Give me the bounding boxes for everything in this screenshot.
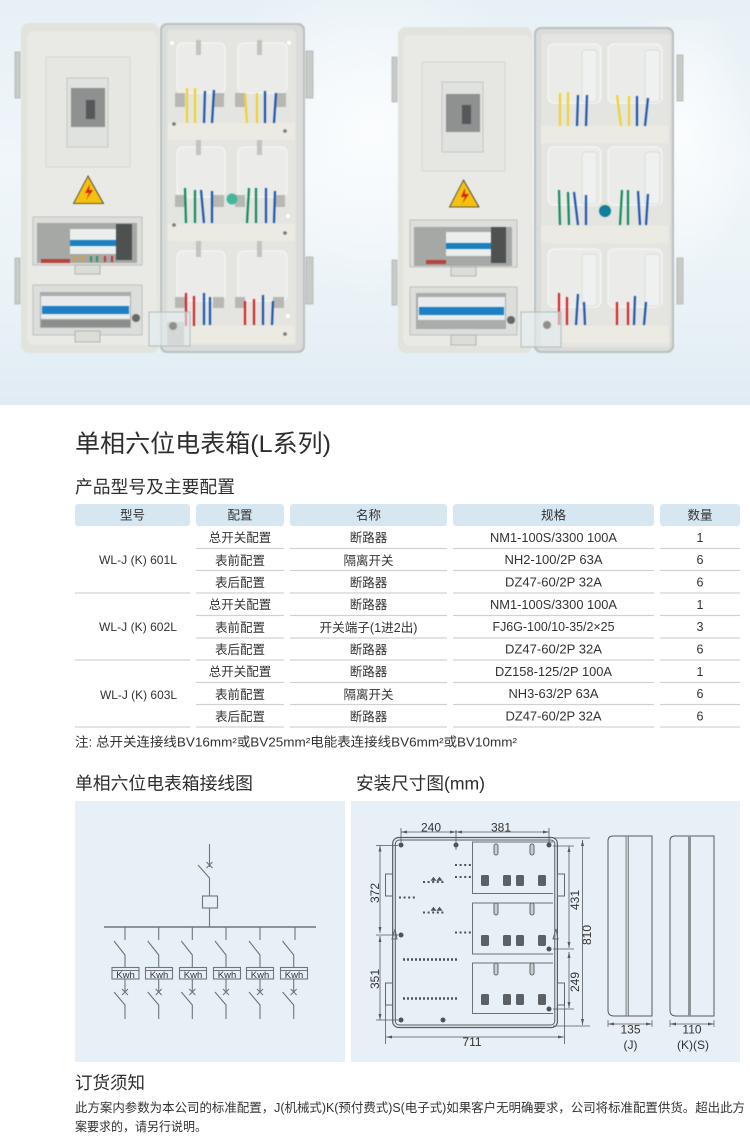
side view J: (J) (624, 1038, 638, 1052)
meter labels: Kwh (184, 970, 202, 981)
heading: product models: 产品型号及主要配置 (75, 477, 235, 497)
rows 603L: NH3-63/2P 63A (508, 687, 599, 701)
transparent cover (534, 27, 674, 353)
hinges (15, 51, 313, 304)
branch 5 (246, 927, 274, 1019)
meter modules (582, 50, 660, 306)
drilled hole rows (399, 865, 472, 998)
rows 603L: 断路器 (350, 709, 388, 724)
rows 601L: NH2-100/2P 63A (504, 553, 603, 567)
upper module window (33, 217, 142, 265)
lower module window (410, 287, 517, 335)
warning triangle (450, 180, 479, 207)
dimension numbers: 381 (491, 820, 511, 834)
mounting slots (494, 844, 534, 975)
rows 601L: NM1-100S/3300 100A (490, 531, 618, 545)
rows 601L: 断路器 (350, 575, 388, 590)
side view K S: 110 (682, 1022, 702, 1036)
table header: 名称 (356, 508, 381, 522)
model names: WL-J (K) 601L (99, 553, 177, 567)
dimension numbers: 431 (568, 890, 582, 910)
side view K S (670, 836, 714, 1052)
photo banner background (0, 0, 750, 405)
rows 602L: FJ6G-100/10-35/2×25 (492, 620, 615, 634)
dimension numbers: 351 (368, 969, 382, 989)
text block: order notes: 案要求的，请另行说明。 (75, 1119, 207, 1134)
rows 601L: 6 (697, 553, 704, 567)
rows 602L: 断路器 (350, 642, 388, 657)
rows 603L: 总开关配置 (209, 665, 271, 679)
side view J: 135 (620, 1022, 641, 1036)
meter labels: Kwh (150, 970, 168, 981)
terminals (175, 93, 286, 308)
meter labels: Kwh (285, 970, 303, 981)
shelves (168, 123, 295, 343)
branch 3 (180, 927, 206, 1019)
rows 601L: 隔离开关 (343, 553, 394, 568)
table header: 规格 (541, 508, 566, 522)
table header (75, 504, 740, 526)
rows 603L: 表后配置 (215, 710, 265, 724)
rows 603L (209, 664, 704, 724)
branch 4 (214, 927, 240, 1019)
rows 603L: 隔离开关 (343, 687, 394, 702)
rows 602L: 断路器 (350, 597, 388, 612)
panel: wiring diagram (75, 801, 345, 1062)
transparent cover (160, 23, 305, 353)
front outline (393, 838, 557, 1028)
rows 601L: DZ47-60/2P 32A (505, 576, 603, 590)
meter bays (177, 43, 287, 301)
upper module window (410, 220, 517, 267)
rows 601L: 表后配置 (215, 576, 265, 590)
dimension lines (376, 828, 590, 1044)
door (398, 27, 532, 353)
rows 602L: 表前配置 (215, 620, 265, 635)
dimension arrows (378, 830, 584, 1038)
table header: 配置 (227, 508, 253, 522)
dimension numbers: 249 (568, 972, 582, 992)
model names: WL-J (K) 602L (99, 620, 177, 634)
table header: 数量 (687, 508, 713, 522)
heading: wiring diagram: 单相六位电表箱接线图 (75, 774, 253, 794)
rows 603L: 6 (697, 710, 704, 724)
rows 603L: 6 (697, 687, 704, 701)
rows 603L: DZ47-60/2P 32A (506, 710, 602, 724)
hinges (386, 874, 564, 1005)
side view J (608, 836, 652, 1052)
branch 6 (280, 927, 308, 1019)
dimension numbers: 810 (580, 925, 594, 945)
rows 602L: 1 (697, 598, 704, 612)
rows 601L: 断路器 (350, 530, 388, 545)
rows 602L: 表后配置 (215, 643, 265, 657)
warning triangle (74, 176, 104, 204)
rows 602L: DZ47-60/2P 32A (505, 642, 603, 656)
latch (521, 312, 561, 347)
rows 603L: 1 (697, 665, 704, 679)
hinges (392, 55, 683, 305)
table rules (75, 548, 740, 727)
meter bays (548, 44, 662, 307)
table header: 型号 (120, 508, 145, 522)
table: models and configuration (75, 504, 740, 727)
latch (149, 312, 190, 346)
dimension numbers: 711 (462, 1035, 482, 1049)
dimension numbers: 372 (368, 883, 382, 903)
panel: installation dimensions (351, 801, 740, 1062)
main breaker window (67, 78, 108, 147)
rows 602L: NM1-100S/3300 100A (490, 598, 618, 612)
side view K S: (K)(S) (677, 1038, 709, 1052)
meter labels (116, 970, 303, 981)
meter compartments (472, 842, 553, 1014)
rows 601L (209, 530, 704, 590)
shelves (541, 126, 668, 343)
wires (559, 92, 648, 325)
rows 603L: DZ158-125/2P 100A (495, 665, 613, 679)
branch 2 (146, 927, 172, 1019)
screws (170, 41, 291, 318)
model names (99, 553, 177, 702)
text block: order notes: 此方案内参数为本公司的标准配置，J(机械式)K(预付费式)S(电子式)如果客户无明确要求，公司将标准配置供货。超出此方 (75, 1100, 745, 1115)
main switch and busbar (104, 844, 316, 927)
door (21, 23, 159, 353)
table footnote: 注: 总开关连接线BV16mm²或BV25mm²电能表连接线BV6mm²或BV10mm² (75, 734, 518, 750)
rows 603L: 表前配置 (215, 687, 265, 702)
rows 603L: 断路器 (350, 664, 388, 679)
wires (185, 88, 276, 326)
meter labels: Kwh (251, 970, 269, 981)
heading: installation dimensions: 安装尺寸图(mm) (356, 774, 485, 794)
rows 601L: 1 (697, 531, 704, 545)
meter labels: Kwh (116, 970, 135, 981)
model names: WL-J (K) 603L (100, 688, 177, 702)
rows 602L (209, 597, 704, 657)
meter terminals (481, 875, 546, 1005)
text block: order notes (75, 1100, 745, 1134)
mounting holes (398, 842, 552, 1022)
dimension numbers: 240 (421, 820, 441, 834)
main breaker window (442, 82, 483, 152)
heading: order notes: 订货须知 (75, 1073, 145, 1093)
mounting slots (196, 40, 262, 257)
rows 602L: 6 (697, 642, 704, 656)
branch 1 (112, 927, 139, 1019)
rows 601L: 6 (697, 576, 704, 590)
rows 602L: 3 (697, 620, 704, 634)
meter labels: Kwh (218, 970, 236, 981)
title: 单相六位电表箱(L系列) (75, 430, 331, 458)
lower module window (33, 285, 142, 335)
dimension numbers (368, 820, 594, 1049)
rows 602L: 开关端子(1进2出) (320, 621, 418, 635)
rows 602L: 总开关配置 (209, 598, 271, 612)
rows 601L: 总开关配置 (209, 531, 271, 545)
photo: right cabinet (392, 27, 683, 353)
rows 601L: 表前配置 (215, 553, 265, 568)
photo: left cabinet (15, 23, 313, 353)
